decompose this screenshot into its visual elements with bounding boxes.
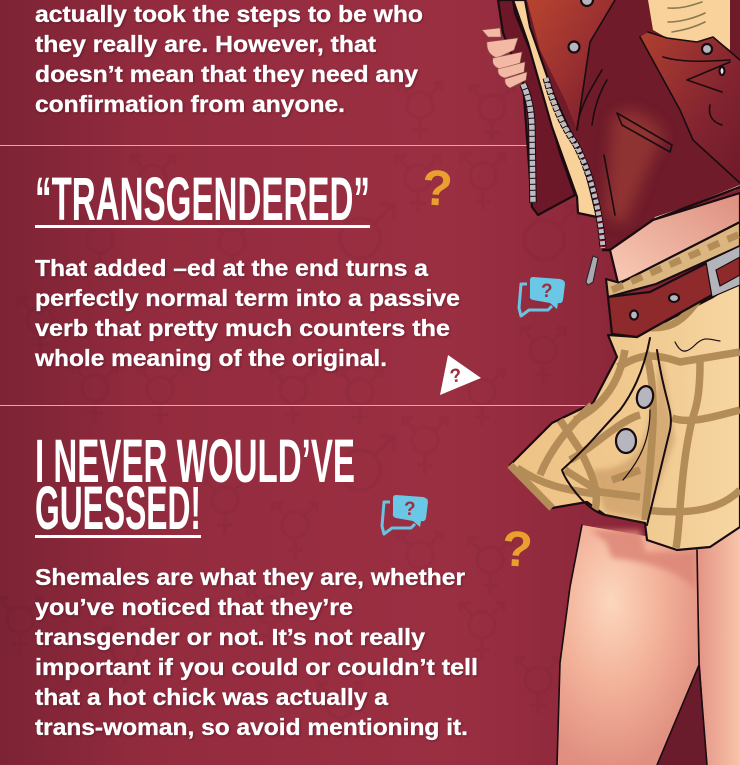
illustration: figure in jacket and plaid skirt [482,0,740,765]
section 3: body text [35,564,478,740]
section 3: body text: Shemales are what they are, whether [35,564,465,590]
section 2: body text: That added –ed at the end turns a [35,255,428,281]
icon: orange question mark: ? [420,159,454,217]
zippers [523,78,603,248]
icon: white triangle with question mark [440,355,481,395]
section 2: body text: verb that pretty much counters the [35,315,450,341]
skirt [510,280,740,550]
cream hem strip [653,185,740,220]
background pattern: gender symbols [0,81,578,739]
skin at neck [648,0,730,50]
section 2: body text: perfectly normal term into a passive [35,285,460,311]
section 1: body text: doesn’t mean that they need any [35,61,418,87]
skirt button lower [616,429,636,453]
section 1: body text: they really are. However, that [35,31,376,57]
section 3: body text: important if you could or couldn’t tell [35,654,478,680]
section 1: body text: actually took the steps to be who [35,1,423,27]
jacket buttons [568,0,724,75]
section 2: heading [35,165,370,233]
section 2: body text [34,255,460,371]
icon: orange question mark lower: ? [500,520,534,578]
legs [557,525,740,765]
section 3: body text: you’ve noticed that they’re [35,594,353,620]
section 2: heading: “TRANSGENDERED” [35,165,370,233]
belt buckle [706,246,740,297]
section 3: heading: GUESSED! [35,474,201,542]
jacket lower highlight [605,110,665,225]
icon: speech bubbles lower: ? [404,499,416,520]
zipper pull [586,256,598,285]
jacket inner lining [513,0,597,217]
section 3: body text: transgender or not. It’s not really [35,624,425,650]
belt loop band [606,222,740,297]
hand [482,28,527,88]
section 3: body text: that a hot chick was actually a [35,684,388,710]
section 2: body text: whole meaning of the original. [34,345,387,371]
icon: speech bubbles lower [382,495,428,534]
section 3: body text: trans-woman, so avoid mentioning it. [35,714,468,740]
section 3: heading [35,427,355,542]
icon: speech bubbles: ? [541,281,553,302]
jacket body [525,0,740,250]
belt [608,246,740,337]
midriff [610,193,740,283]
section 1: body text: confirmation from anyone. [35,91,345,117]
right lapel [640,32,740,183]
icon: speech bubbles [519,277,565,316]
jacket inner left flap [498,0,575,215]
section 1: body text [35,1,423,117]
skirt button upper [635,385,655,409]
jacket left panel [527,0,615,130]
jacket seams and pocket [577,0,672,215]
icon: white triangle with question mark: ? [448,365,463,388]
section 3: heading: I NEVER WOULD’VE [35,427,355,495]
